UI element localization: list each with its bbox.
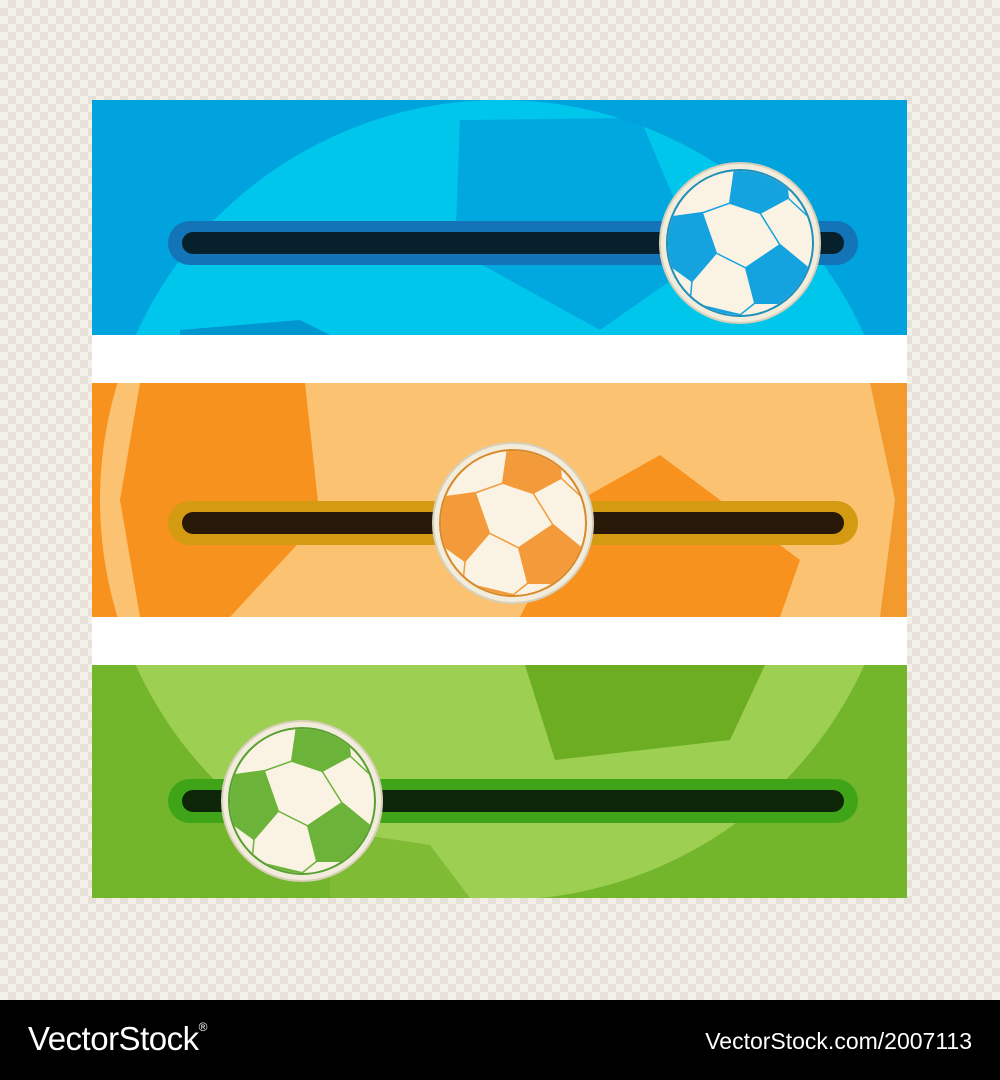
footer url text: VectorStock.com/2007113 <box>705 1028 972 1054</box>
footer bar <box>0 1000 1000 1080</box>
main panel <box>92 100 907 898</box>
band: green <box>92 665 907 898</box>
icon: blue soccer ball knob <box>660 163 820 338</box>
white separator 2 <box>92 617 907 665</box>
footer logo text: VectorStock® <box>28 1020 207 1057</box>
icon: orange soccer ball knob <box>433 443 593 618</box>
band: blue <box>92 100 907 335</box>
slider track: blue <box>168 221 858 265</box>
band: orange <box>92 383 907 617</box>
slider track: green <box>168 779 858 823</box>
white separator 1 <box>92 335 907 383</box>
icon: green soccer ball knob <box>222 721 382 896</box>
slider track: orange <box>168 501 858 545</box>
